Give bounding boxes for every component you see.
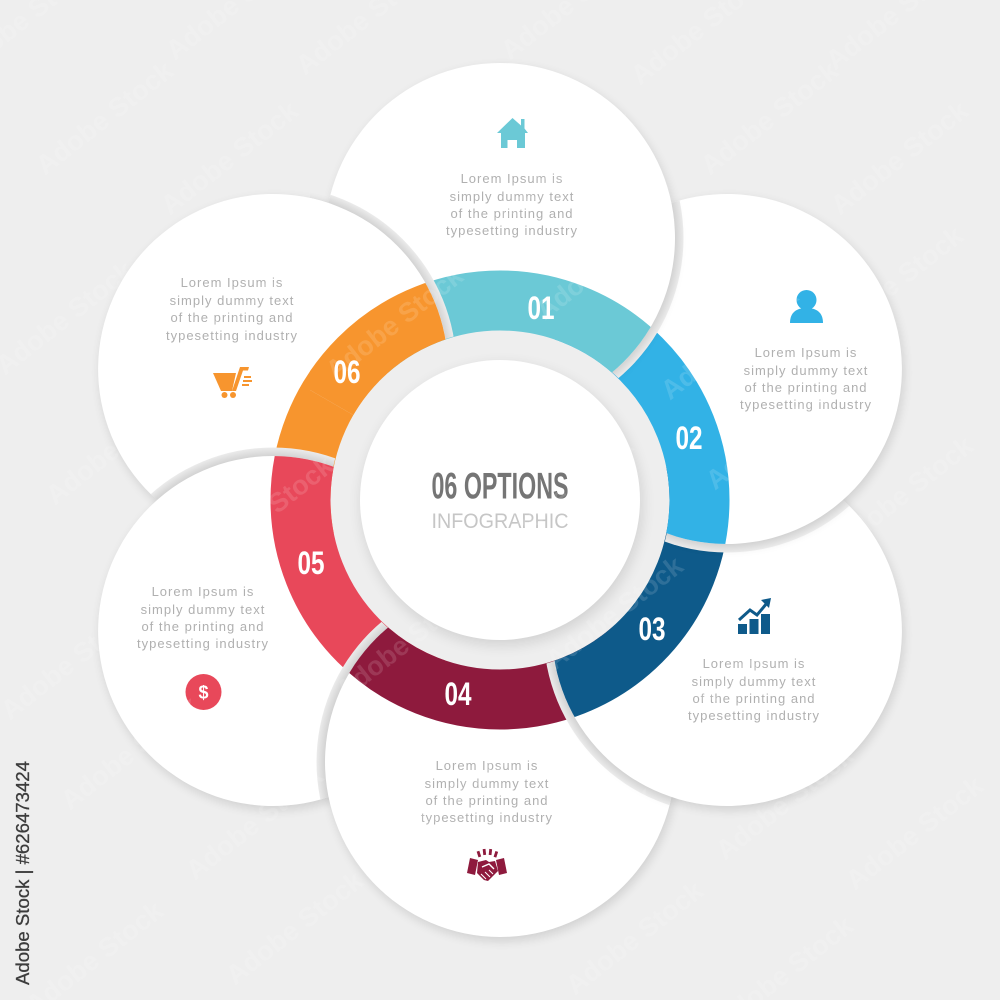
icon: user [790, 290, 823, 323]
text block 03: of the printing and [692, 691, 816, 706]
text block 06: of the printing and [170, 310, 294, 325]
watermark: Adobe Stock [370, 395, 519, 521]
watermark: Adobe Stock [330, 580, 479, 706]
number 03: 03 [638, 611, 666, 647]
icon: shopping cart [213, 367, 252, 398]
watermark: Adobe Stock [820, 220, 969, 346]
icon: house [497, 118, 528, 148]
watermark: Adobe Stock [830, 430, 979, 556]
watermark: Adobe Stock [190, 450, 339, 576]
icon: growth chart [738, 598, 771, 634]
text block 06 [166, 275, 298, 343]
text block 04 [421, 758, 553, 825]
text block 01: of the printing and [450, 206, 574, 221]
petal 05 shape with red ring segment [98, 448, 446, 813]
text block 02: simply dummy text [744, 363, 868, 378]
watermark: Adobe Stock [840, 770, 989, 896]
watermark: Adobe Stock [180, 760, 329, 886]
text block 04: typesetting industry [421, 810, 553, 825]
text block 03 [688, 656, 820, 723]
text block 01: typesetting industry [446, 223, 578, 238]
text block 04: Lorem Ipsum is [436, 758, 538, 773]
petal 06 overlap above petal 01 [310, 195, 454, 415]
watermark: Adobe Stock [510, 780, 659, 906]
panel: option 02 [554, 194, 906, 552]
petal 06 shape with orange ring segment [98, 194, 454, 533]
text block 02 [740, 345, 872, 412]
text block 05: Lorem Ipsum is [152, 584, 254, 599]
text block 03: Lorem Ipsum is [703, 656, 805, 671]
text block 01 [446, 171, 578, 238]
watermark: Adobe Stock [530, 200, 679, 326]
watermark: Adobe Stock [690, 590, 839, 716]
text block 05: of the printing and [141, 619, 265, 634]
panel: option 06 [98, 194, 446, 533]
watermark: Adobe Stock [700, 370, 849, 496]
text block 05 [137, 584, 269, 651]
icon: dollar coin [186, 674, 222, 710]
watermark: Adobe Stock [360, 55, 509, 181]
watermark: Adobe Stock [655, 280, 804, 406]
text block 01: Lorem Ipsum is [461, 171, 563, 186]
icon: dollar coin: $ [198, 682, 209, 702]
panel: option 03 [546, 467, 906, 813]
watermark: Adobe Stock [490, 430, 639, 556]
text block 04: of the printing and [425, 793, 549, 808]
text block 05: simply dummy text [141, 602, 265, 617]
text block 04: simply dummy text [425, 776, 549, 791]
panel: option 05 [98, 448, 446, 813]
watermark: Adobe Stock [825, 95, 974, 221]
panel: option 04 [316, 622, 676, 944]
text block 02: Lorem Ipsum is [755, 345, 857, 360]
text block 02: typesetting industry [740, 397, 872, 412]
number 01: 01 [528, 290, 554, 326]
text block 02: of the printing and [744, 380, 868, 395]
watermark: Adobe Stock [490, 105, 639, 231]
watermark: Adobe Stock [200, 220, 349, 346]
watermark: Adobe Stock [155, 95, 304, 221]
panel: option 01 [330, 63, 684, 378]
watermark: Adobe Stock [710, 740, 859, 866]
subtitle: INFOGRAPHIC [432, 510, 568, 533]
watermark: Adobe Stock [55, 690, 204, 816]
petal 04 shape with maroon ring segment [316, 622, 676, 944]
title: 06 OPTIONS [432, 466, 568, 506]
center circle [360, 360, 642, 645]
text block 06: typesetting industry [166, 328, 298, 343]
watermark: Adobe Stock [320, 260, 469, 386]
text block 06: Lorem Ipsum is [181, 275, 283, 290]
icon: handshake [467, 849, 507, 881]
watermark: Adobe Stock [220, 865, 369, 991]
stock id side label: Adobe Stock | #626473424 [13, 761, 33, 985]
text block 03: simply dummy text [692, 674, 816, 689]
watermark: Adobe Stock [40, 385, 189, 511]
text block 01: simply dummy text [450, 189, 574, 204]
number 04: 04 [444, 676, 472, 712]
text block 05: typesetting industry [137, 636, 269, 651]
petal 02 shape with blue ring segment [554, 194, 906, 552]
number 05: 05 [298, 545, 324, 581]
watermark: Adobe Stock [370, 740, 519, 866]
text block 06: simply dummy text [170, 293, 294, 308]
watermark: Adobe Stock [695, 55, 844, 181]
number 06: 06 [334, 354, 360, 390]
watermark: Adobe Stock [560, 875, 709, 1000]
petal 03 shape with navy ring segment [546, 467, 906, 813]
text block 03: typesetting industry [688, 708, 820, 723]
petal 01 shape with cyan ring segment [330, 63, 684, 378]
watermark: Adobe Stock [30, 55, 179, 181]
number 02: 02 [676, 420, 702, 456]
watermark: Adobe Stock [540, 550, 689, 676]
